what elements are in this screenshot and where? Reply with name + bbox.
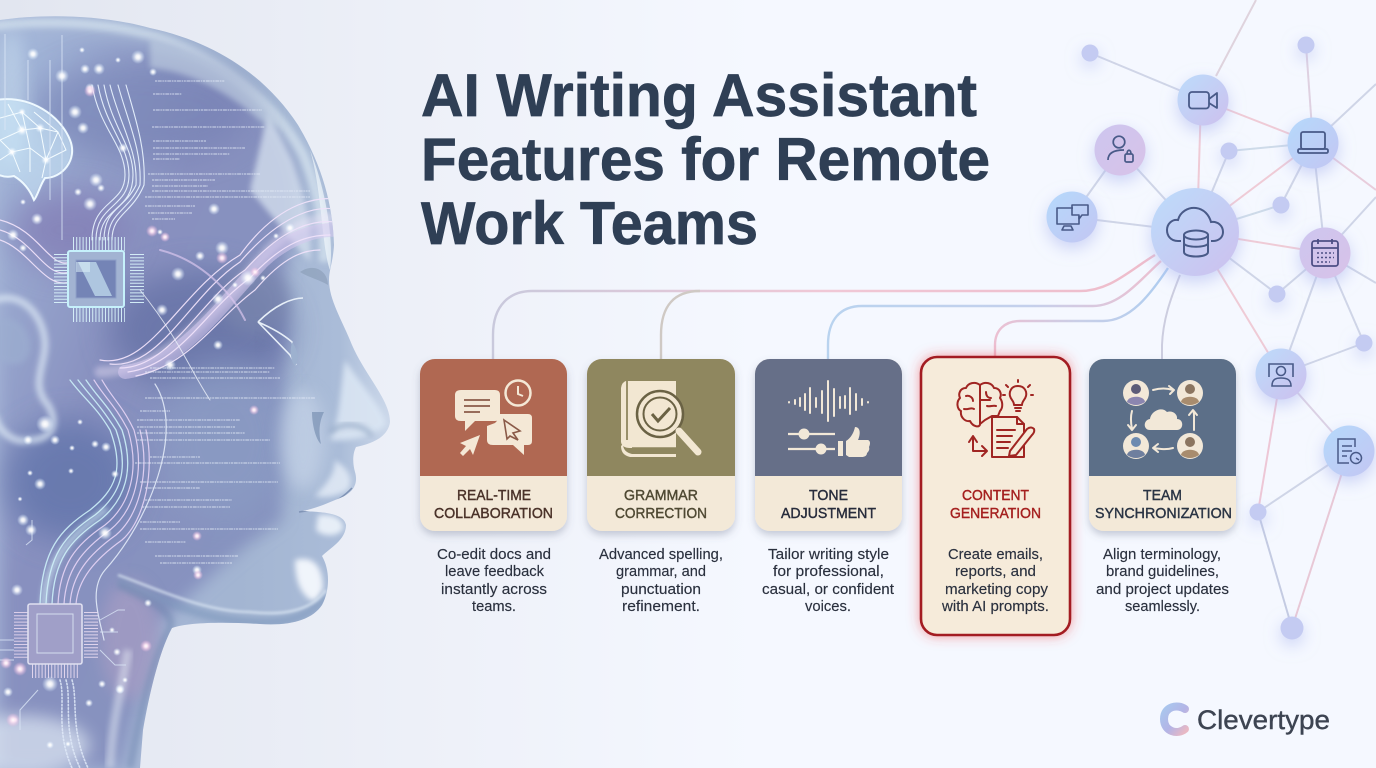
- flowing data waves: [0, 85, 345, 768]
- label: SYNCHRONIZATION: [1095, 506, 1232, 522]
- icon: chat bubbles, clock and cursors: [455, 380, 532, 456]
- description: tone adjustment: voices.: [805, 598, 851, 615]
- dark blue patches: [35, 60, 255, 160]
- network hub: cloud database: [1151, 188, 1239, 276]
- label: REAL-TIME: [457, 488, 531, 504]
- description: team synchronization: brand guidelines,: [1106, 563, 1219, 580]
- microchip upper: [61, 244, 137, 315]
- description: team synchronization: seamlessly.: [1125, 598, 1200, 615]
- icon: brain, light bulb and document: [957, 380, 1034, 457]
- network node: monitor with code: [1046, 192, 1098, 242]
- face highlights: [281, 390, 325, 490]
- network node: video: [1178, 74, 1228, 126]
- network connections: [1072, 0, 1376, 628]
- description: marketing copy: [945, 581, 1048, 598]
- icon: four teammates around a cloud: [1123, 380, 1203, 459]
- label: TONE: [809, 488, 848, 504]
- description: with AI prompts.: [941, 598, 1049, 615]
- connector lines to feature cards: [493, 255, 1168, 359]
- circuit traces: [0, 34, 126, 730]
- description: team synchronization: Align terminology,: [1103, 546, 1221, 563]
- description: team synchronization: and project updates: [1096, 581, 1229, 598]
- glowing brain: [0, 99, 72, 200]
- description: grammar correction: grammar, and: [616, 563, 706, 580]
- network node: calendar: [1300, 228, 1350, 278]
- label: [950, 488, 1041, 522]
- description: tone adjustment: Tailor writing style: [768, 546, 889, 563]
- mouth, nostril, eye: [299, 488, 352, 512]
- description: [941, 546, 1049, 615]
- description: grammar correction: refinement.: [622, 598, 700, 615]
- label: [1095, 488, 1232, 522]
- icon: book and magnifier: [621, 381, 698, 457]
- description: real-time collaboration: [437, 546, 551, 615]
- label: CORRECTION: [615, 506, 707, 522]
- glowing particles: [3, 47, 295, 749]
- ear: [0, 298, 53, 441]
- description: team synchronization: [1096, 546, 1229, 615]
- label: ADJUSTMENT: [781, 506, 876, 522]
- card: team synchronization: [1089, 359, 1236, 531]
- description: real-time collaboration: teams.: [472, 598, 516, 615]
- card: grammar correction: [587, 359, 735, 531]
- card: content generation (highlighted): [921, 357, 1070, 635]
- description: real-time collaboration: instantly across: [441, 581, 547, 598]
- logo: Clevertype: Clevertype: [1197, 705, 1330, 735]
- illustration: translucent AI head in profile: [0, 0, 400, 768]
- skull rim: [0, 23, 324, 262]
- network node: portrait: [1256, 348, 1306, 400]
- label: GENERATION: [950, 506, 1041, 522]
- label: CONTENT: [962, 488, 1029, 504]
- description: tone adjustment: for professional,: [773, 563, 884, 580]
- icon: waveform, sliders and thumbs up: [788, 381, 870, 457]
- description: tone adjustment: casual, or confident: [762, 581, 895, 598]
- description: tone adjustment: [762, 546, 895, 615]
- card: tone adjustment: [755, 359, 902, 531]
- description: real-time collaboration: leave feedback: [445, 563, 544, 580]
- label: [434, 488, 553, 522]
- network node: user with lock: [1094, 124, 1146, 176]
- label: [781, 488, 876, 522]
- description: grammar correction: Advanced spelling,: [599, 546, 723, 563]
- label: GRAMMAR: [624, 488, 698, 504]
- card: real-time collaboration: [420, 359, 567, 531]
- title: Features for Remote: [421, 126, 990, 193]
- label: TEAM: [1143, 488, 1182, 504]
- code lines: [135, 81, 315, 563]
- forehead glass highlights: [250, 112, 310, 262]
- network node: laptop: [1288, 118, 1338, 168]
- jaw line: [118, 580, 326, 622]
- network node: note with clock: [1324, 426, 1374, 476]
- description: Create emails,: [948, 546, 1043, 563]
- title: Work Teams: [421, 190, 758, 257]
- title: [421, 62, 990, 257]
- microchip lower: [21, 604, 91, 671]
- description: reports, and: [955, 563, 1036, 580]
- label: [615, 488, 707, 522]
- description: grammar correction: punctuation: [621, 581, 701, 598]
- description: grammar correction: [599, 546, 723, 615]
- title: AI Writing Assistant: [421, 62, 977, 129]
- network node: small dots: [1082, 36, 1372, 640]
- label: COLLABORATION: [434, 506, 553, 522]
- description: real-time collaboration: Co-edit docs and: [437, 546, 551, 563]
